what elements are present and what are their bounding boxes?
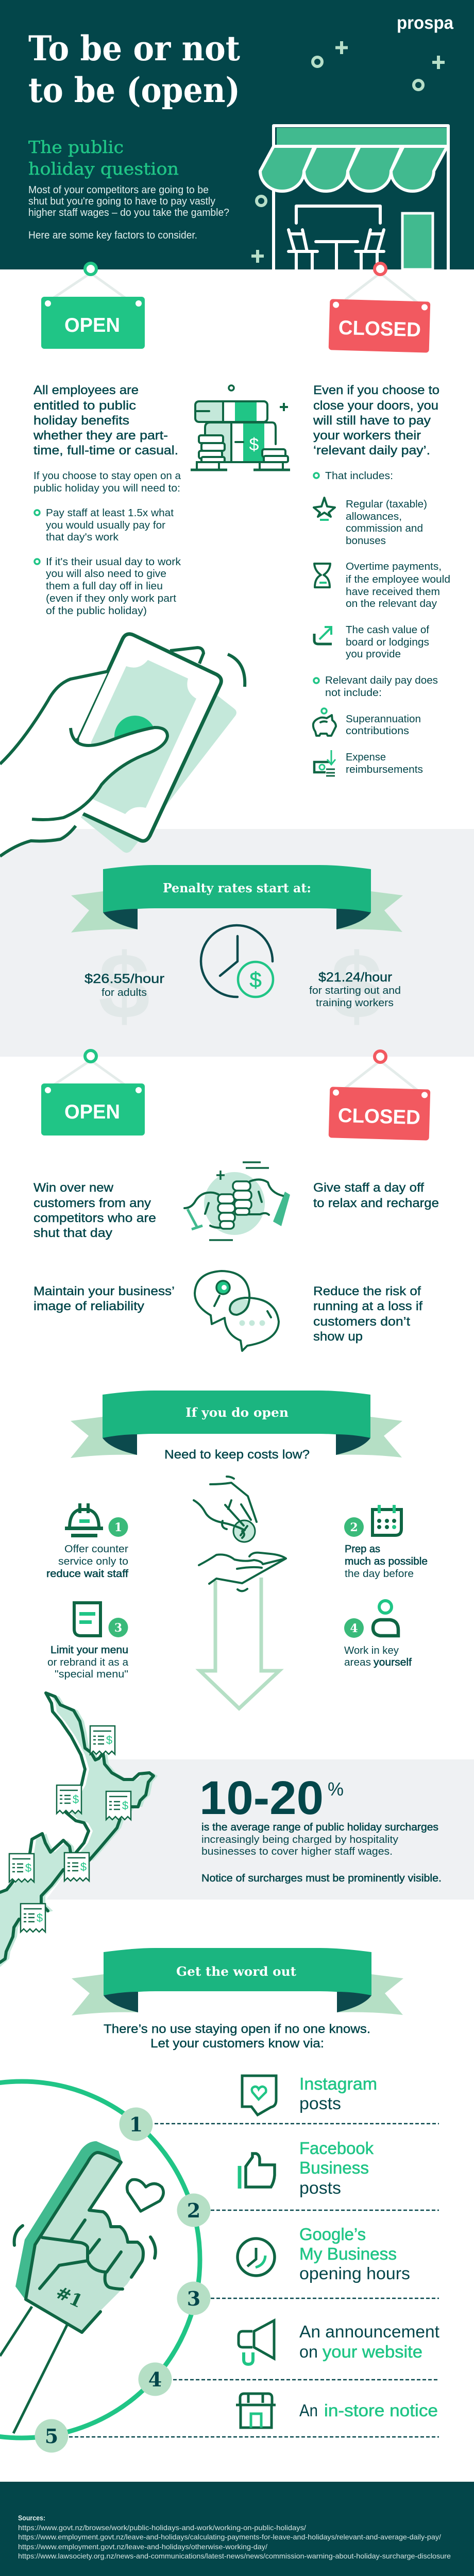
- text: facebook: Business: [299, 2158, 369, 2177]
- sign: CLOSED: [329, 263, 430, 353]
- text: website: your website: [323, 2342, 422, 2361]
- icon: clock opening hours: [238, 2239, 275, 2276]
- icon: clock with dollar: [201, 925, 273, 997]
- tip 2: prep: much as possible: [345, 1556, 428, 1567]
- text: google: Google’s: [299, 2225, 366, 2244]
- text: instagram: posts: [299, 2094, 341, 2113]
- icon: cash arrow: [314, 627, 332, 644]
- icon: calendar: [373, 1505, 401, 1535]
- ribbon: if you do open: If you do open: [185, 1405, 289, 1420]
- text: reliability: Maintain your business’: [33, 1284, 175, 1298]
- receipt 1: [90, 1726, 115, 1754]
- text block: open heading: All employees are: [33, 383, 139, 397]
- icon: shop front: [260, 126, 448, 269]
- text block: open requirements: you will also need to give: [46, 568, 166, 580]
- illustration: foam finger: [0, 2141, 163, 2433]
- tip 3: limit menu: 3: [114, 1621, 122, 1635]
- sign: CLOSED: CLOSED: [338, 317, 421, 341]
- sign: OPEN second: [41, 1050, 145, 1136]
- panel: footer sources: https://www.employment.govt.nz/leave-and-holidays/otherwise-working-day/: [18, 2543, 267, 2551]
- sign: OPEN: OPEN: [64, 314, 120, 336]
- tip 1: counter service: service only to: [58, 1556, 128, 1567]
- tip 1: counter service: reduce wait staff: [46, 1568, 128, 1580]
- text: facebook: Facebook: [299, 2139, 374, 2158]
- text: super: [346, 714, 421, 737]
- text: not included: not include:: [325, 687, 382, 699]
- illustration: hand holding banknotes: [0, 634, 245, 856]
- text: cash value: The cash value of: [346, 624, 429, 636]
- icon: person: [373, 1601, 398, 1636]
- timeline arc: [0, 2081, 200, 2438]
- text block: open requirements: public holiday you will need to:: [33, 483, 180, 494]
- receipt 6: $: [37, 1911, 43, 1924]
- text block: open requirements: (even if they only work part: [46, 593, 176, 604]
- stat: adults: for adults: [101, 987, 147, 998]
- stat: trainees: for starting out and: [309, 985, 401, 996]
- icon: instagram post: [242, 2076, 276, 2115]
- receipt 6: [21, 1904, 45, 1932]
- icon: menu: [74, 1603, 100, 1636]
- text: reliability: image of reliability: [33, 1299, 144, 1313]
- text: website: An announcement: [299, 2322, 439, 2341]
- panel: footer sources: https://www.lawsociety.org.nz/news-and-communications/latest-news/news/commission-warning-about-holiday-surcharge-disclosure: [18, 2552, 451, 2560]
- tip 2: prep: 2: [350, 1521, 358, 1534]
- text: allowances: commission and: [346, 523, 423, 534]
- timeline: numbered markers: 1: [129, 2113, 143, 2136]
- text: overtime: Overtime payments,: [346, 561, 442, 572]
- stat: 10-20%: %: [328, 1778, 344, 1800]
- tip 4: work yourself: Work in key: [344, 1645, 399, 1656]
- text: instagram: Instagram: [299, 2074, 377, 2093]
- text block: open heading: entitled to public: [33, 399, 136, 413]
- text block: open requirements: them a full day off in lieu: [46, 581, 163, 592]
- ribbon: get the word out: [72, 1948, 403, 2015]
- icon: small store: [236, 2394, 276, 2428]
- text block: open heading: [33, 383, 178, 457]
- text: website: [299, 2322, 439, 2361]
- text: no use staying open: There’s no use staying open if no one knows.: [104, 2022, 370, 2036]
- text: allowances: allowances,: [346, 511, 402, 522]
- text: expenses: reimbursements: [346, 764, 423, 775]
- text: surcharge explanation: Notice of surcharges must be prominently visible.: [201, 1873, 442, 1884]
- text: allowances: Regular (taxable): [346, 499, 427, 510]
- receipt 2: [57, 1785, 81, 1814]
- sign: CLOSED second: CLOSED: [337, 1105, 420, 1129]
- timeline: numbered markers: 5: [45, 2425, 58, 2448]
- receipt 3: $: [122, 1799, 128, 1812]
- ribbon: if you do open: [71, 1391, 402, 1458]
- icon: piggy bank: [313, 708, 336, 736]
- text: facebook: [299, 2139, 374, 2197]
- text: reduce risk: show up: [313, 1330, 363, 1344]
- text: win customers: shut that day: [33, 1226, 112, 1240]
- text: no use staying open: Let your customers know via:: [150, 2037, 324, 2050]
- text block: open requirements: If it's their usual day to work: [46, 556, 181, 568]
- stat: trainees: training workers: [316, 997, 394, 1009]
- text block: open requirements: If you choose to stay open on a: [33, 470, 181, 482]
- intro text: Most of your competitors are going to be: [28, 184, 209, 196]
- timeline: numbered markers: 4: [148, 2368, 162, 2391]
- stat: trainees: $21.24/hour: [318, 970, 392, 985]
- tip 1: counter service: 1: [114, 1521, 122, 1534]
- icon: clock with dollar: $: [249, 968, 262, 992]
- stat: trainees: [309, 970, 401, 1009]
- subtitle: [28, 137, 179, 179]
- tip 2: prep: [344, 1505, 428, 1580]
- text: reduce risk: customers don’t: [313, 1315, 410, 1329]
- timeline: numbered markers: 3: [187, 2287, 200, 2310]
- text: surcharge explanation: is the average range of public holiday surcharges: [201, 1822, 438, 1833]
- subtitle: holiday question: [28, 159, 179, 179]
- text: win customers: competitors who are: [33, 1211, 156, 1225]
- text: surcharge explanation: [201, 1822, 442, 1884]
- text: in-store: An: [299, 2401, 318, 2420]
- decorative rings and plus signs: [251, 41, 445, 263]
- background dollar signs: [98, 935, 382, 1038]
- text: win customers: customers from any: [33, 1196, 151, 1210]
- intro text: higher staff wages – do you take the gamble?: [28, 207, 229, 218]
- text: super: contributions: [346, 725, 409, 737]
- icon: money stack: $: [249, 435, 259, 454]
- text: google: opening hours: [299, 2264, 410, 2283]
- text block: closed heading: your workers their: [313, 429, 421, 443]
- tip 4: work yourself: areas: [344, 1657, 371, 1668]
- tip 1: counter service: Offer counter: [64, 1544, 128, 1555]
- text: expenses: Expense: [346, 752, 386, 763]
- text: overtime: on the relevant day: [346, 598, 437, 609]
- sign: CLOSED second: [329, 1051, 430, 1141]
- text: cash value: you provide: [346, 649, 401, 660]
- text: allowances: [346, 499, 427, 547]
- text: reduce risk: Reduce the risk of: [313, 1284, 421, 1298]
- panel: footer sources: https://www.employment.govt.nz/leave-and-holidays/calculating-payments-for-leave-and-holidays/relevant-and-average-daily-pay/: [18, 2533, 441, 2541]
- text block: closed heading: ‘relevant daily pay’.: [313, 444, 430, 457]
- text block: open requirements: you would usually pay for: [46, 520, 165, 531]
- tip 3: limit menu: "special menu": [55, 1669, 128, 1680]
- sign: OPEN: [41, 263, 145, 349]
- ribbon: penalty rates: [71, 865, 403, 933]
- text: super: Superannuation: [346, 714, 421, 725]
- intro text: Here are some key factors to consider.: [28, 230, 197, 241]
- panel: footer sources: [0, 2482, 474, 2576]
- text: win customers: [33, 1181, 156, 1240]
- text: need to keep costs low: Need to keep costs low?: [164, 1448, 310, 1462]
- text: win customers: Win over new: [33, 1181, 114, 1195]
- tip 3: limit menu: [47, 1603, 129, 1680]
- map: New Zealand: [0, 1693, 158, 1967]
- ribbon: get the word out: Get the word out: [176, 1964, 296, 1979]
- stat: adults: [84, 972, 164, 998]
- icon: coin dropping between hands: [194, 1477, 286, 1591]
- text block: open requirements: that day's work: [46, 532, 119, 543]
- text: website: on: [299, 2342, 318, 2361]
- text: staff day off: Give staff a day off: [313, 1181, 424, 1195]
- tip 4: work yourself: [344, 1601, 412, 1668]
- text block: closed heading: close your doors, you: [313, 399, 438, 413]
- receipt 5: $: [80, 1860, 87, 1873]
- panel: surcharge band: [46, 1759, 474, 1900]
- intro text: shut but you're going to have to pay vastly: [28, 196, 215, 207]
- panel: footer sources: https://www.govt.nz/browse/work/public-holidays-and-work/working-on-public-holidays/: [18, 2523, 306, 2532]
- text block: open requirements: [33, 470, 181, 617]
- text: google: [299, 2225, 410, 2283]
- logo: prospa: prospa: [397, 13, 453, 33]
- text: cash value: board or lodgings: [346, 637, 429, 648]
- text: staff day off: to relax and recharge: [313, 1196, 439, 1210]
- stat: adults: $26.55/hour: [84, 972, 164, 986]
- panel: header: [0, 0, 474, 269]
- text: surcharge explanation: businesses to cover higher staff wages.: [201, 1846, 393, 1857]
- icon: fist bump: [184, 1162, 290, 1240]
- background dollar signs: $: [98, 935, 150, 1038]
- text block: open heading: holiday benefits: [33, 414, 129, 428]
- illustration: foam finger: #1: [53, 2282, 86, 2312]
- icon: hourglass: [314, 564, 330, 587]
- text: expenses: [346, 752, 423, 775]
- text: not included: [314, 675, 438, 699]
- panel: footer sources: Sources:: [18, 2514, 45, 2522]
- text block: open heading: whether they are part-: [33, 429, 168, 443]
- icon: expense: [314, 750, 335, 776]
- text: reliability: [33, 1284, 175, 1313]
- text block: closed heading: will still have to pay: [313, 414, 431, 428]
- icon: star: [314, 498, 335, 520]
- text: reduce risk: running at a loss if: [313, 1299, 422, 1313]
- receipt 2: $: [73, 1793, 79, 1806]
- text: surcharge explanation: increasingly being charged by hospitality: [201, 1834, 398, 1845]
- text block: open requirements: of the public holiday): [46, 605, 147, 617]
- tip 3: limit menu: Limit your menu: [50, 1645, 128, 1656]
- stat: 10-20%: 10-20: [199, 1772, 324, 1824]
- text block: open heading: time, full-time or casual.: [33, 444, 178, 457]
- tip 1: counter service: [46, 1503, 128, 1580]
- receipt 1: $: [106, 1734, 112, 1747]
- icon: money stack: [191, 385, 290, 470]
- text: reduce risk: [313, 1284, 422, 1344]
- text block: closed heading: [313, 383, 439, 457]
- text: instagram: [299, 2074, 377, 2113]
- tip 4: work yourself: 4: [350, 1622, 358, 1635]
- receipt 4: $: [25, 1861, 31, 1874]
- timeline: numbered markers: 2: [187, 2199, 200, 2222]
- tip 2: prep: the day before: [345, 1568, 414, 1580]
- receipt 5: [64, 1853, 89, 1881]
- icon: service bell: [65, 1503, 103, 1537]
- timeline: dashed lines: [69, 2124, 439, 2437]
- text: cash value: [346, 624, 429, 660]
- icon: megaphone: [239, 2320, 274, 2364]
- text: overtime: have received them: [346, 586, 440, 598]
- title: To be or not: [28, 28, 240, 69]
- text: google: My Business: [299, 2244, 397, 2263]
- subtitle: The public: [28, 137, 124, 157]
- icon: heart outline: [127, 2180, 163, 2211]
- icon: chat bubbles: [195, 1271, 279, 1351]
- text: no use staying open: [104, 2022, 370, 2050]
- receipt 4: [9, 1854, 34, 1882]
- tip 4: work yourself: yourself: [374, 1657, 412, 1668]
- text: in-store: in-store notice: [324, 2401, 438, 2420]
- ribbon: penalty rates: Penalty rates start at:: [163, 880, 311, 895]
- intro text: [28, 184, 229, 241]
- text: overtime: if the employee would: [346, 574, 450, 585]
- background dollar signs: $: [331, 935, 382, 1038]
- timeline: numbered markers: [35, 2107, 210, 2452]
- tip 3: limit menu: or rebrand it as a: [47, 1657, 129, 1668]
- arrow: down: [200, 1578, 279, 1708]
- tip 2: prep: Prep as: [345, 1544, 380, 1555]
- sign: OPEN second: OPEN: [64, 1101, 120, 1123]
- text block: closed heading: Even if you choose to: [313, 383, 439, 397]
- text: allowances: bonuses: [346, 535, 386, 547]
- receipt 3: [106, 1791, 131, 1820]
- title: to be (open): [28, 70, 240, 110]
- text: not included: Relevant daily pay does: [325, 675, 438, 686]
- text block: that includes: That includes:: [325, 470, 393, 482]
- text: facebook: posts: [299, 2178, 341, 2197]
- title: [28, 28, 240, 110]
- text block: open requirements: Pay staff at least 1.5x what: [46, 507, 174, 519]
- icon: thumbs up: [240, 2154, 275, 2189]
- panel: penalty rates band: [0, 829, 474, 1057]
- text: staff day off: [313, 1181, 439, 1210]
- text: overtime: [346, 561, 450, 609]
